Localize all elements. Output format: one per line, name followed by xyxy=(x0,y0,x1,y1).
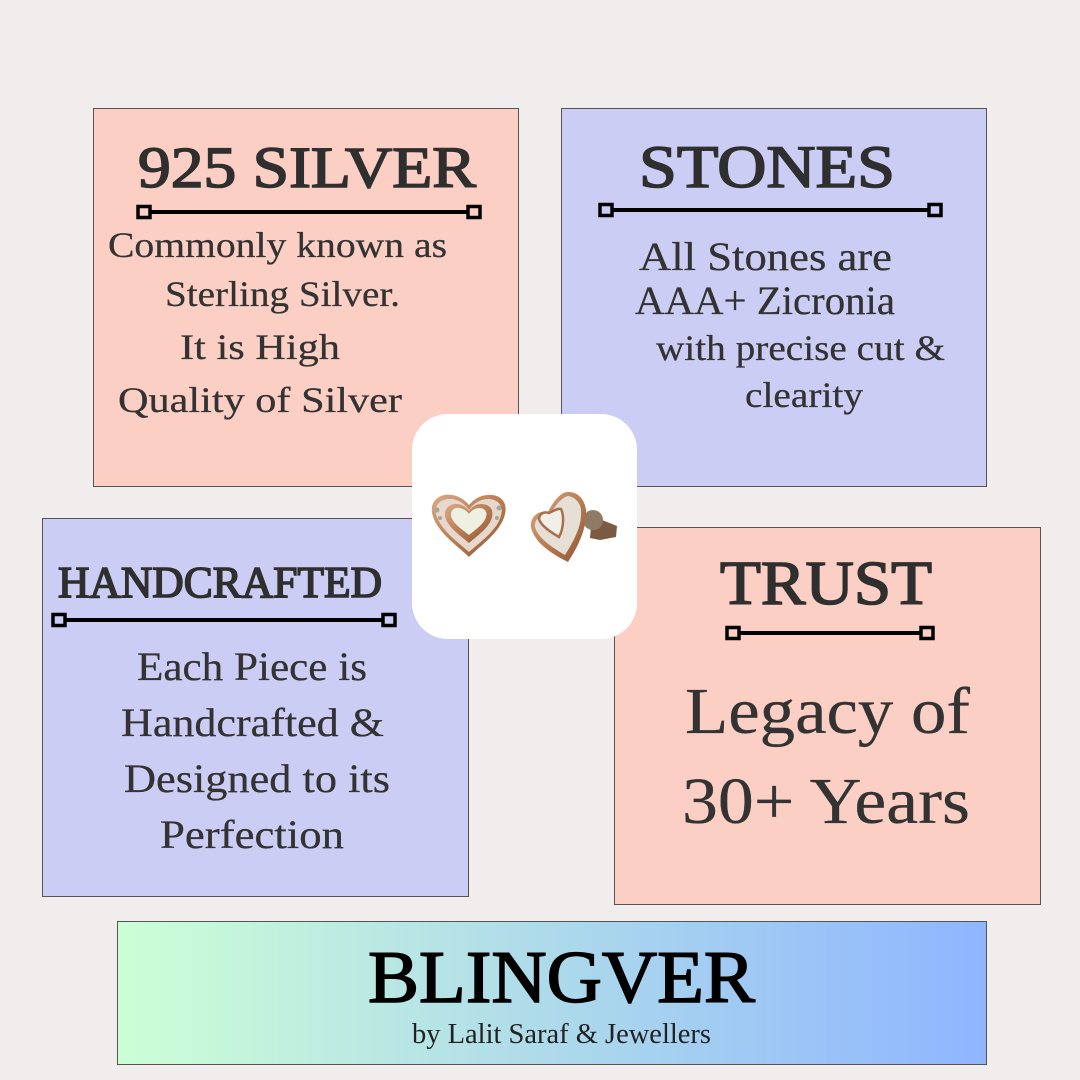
text block: 925 silver description: Commonly known as xyxy=(108,225,447,265)
divider: handcrafted xyxy=(53,614,395,626)
divider: trust xyxy=(727,628,933,638)
text block: stones description: All Stones are xyxy=(639,234,892,279)
panel: trust xyxy=(614,528,1040,904)
text block: stones description: clearity xyxy=(745,375,863,415)
text block: handcrafted description: Handcrafted & xyxy=(121,700,384,745)
text block: 925 silver description: Quality of Silver xyxy=(118,380,402,420)
text block: trust description: 30+ Years xyxy=(682,765,970,838)
text block: 925 silver description xyxy=(108,225,447,420)
text block: handcrafted description: Designed to its xyxy=(124,756,390,801)
text block: handcrafted description: Each Piece is xyxy=(137,644,367,689)
text block: trust description xyxy=(682,675,970,838)
panel: 925 silver xyxy=(94,108,518,486)
text block: handcrafted description xyxy=(121,644,390,857)
heading: brand name: BLINGVER xyxy=(368,937,756,1019)
panel: handcrafted xyxy=(42,518,468,896)
text block: stones description xyxy=(635,234,945,415)
panel: product photo xyxy=(412,414,637,639)
heading: 925 silver: 925 SILVER xyxy=(138,135,476,200)
panel: brand banner xyxy=(118,922,986,1064)
text block: trust description: Legacy of xyxy=(685,675,970,748)
text block: 925 silver description: It is High xyxy=(180,327,340,367)
text block: handcrafted description: Perfection xyxy=(160,812,344,857)
text block: brand tagline: by Lalit Saraf & Jewellers xyxy=(412,1018,711,1050)
icon: heart earring side xyxy=(531,492,617,562)
text block: stones description: AAA+ Zicronia xyxy=(635,278,895,323)
panel: stones xyxy=(562,108,986,486)
divider: 925 silver xyxy=(138,206,480,218)
heading: stones: STONES xyxy=(639,134,895,200)
icon: heart earring front xyxy=(432,495,506,557)
text block: 925 silver description: Sterling Silver. xyxy=(165,274,400,314)
divider: stones xyxy=(600,204,941,216)
heading: handcrafted: HANDCRAFTED xyxy=(58,558,382,607)
text block: stones description: with precise cut & xyxy=(656,328,945,368)
heading: trust: TRUST xyxy=(720,550,932,618)
